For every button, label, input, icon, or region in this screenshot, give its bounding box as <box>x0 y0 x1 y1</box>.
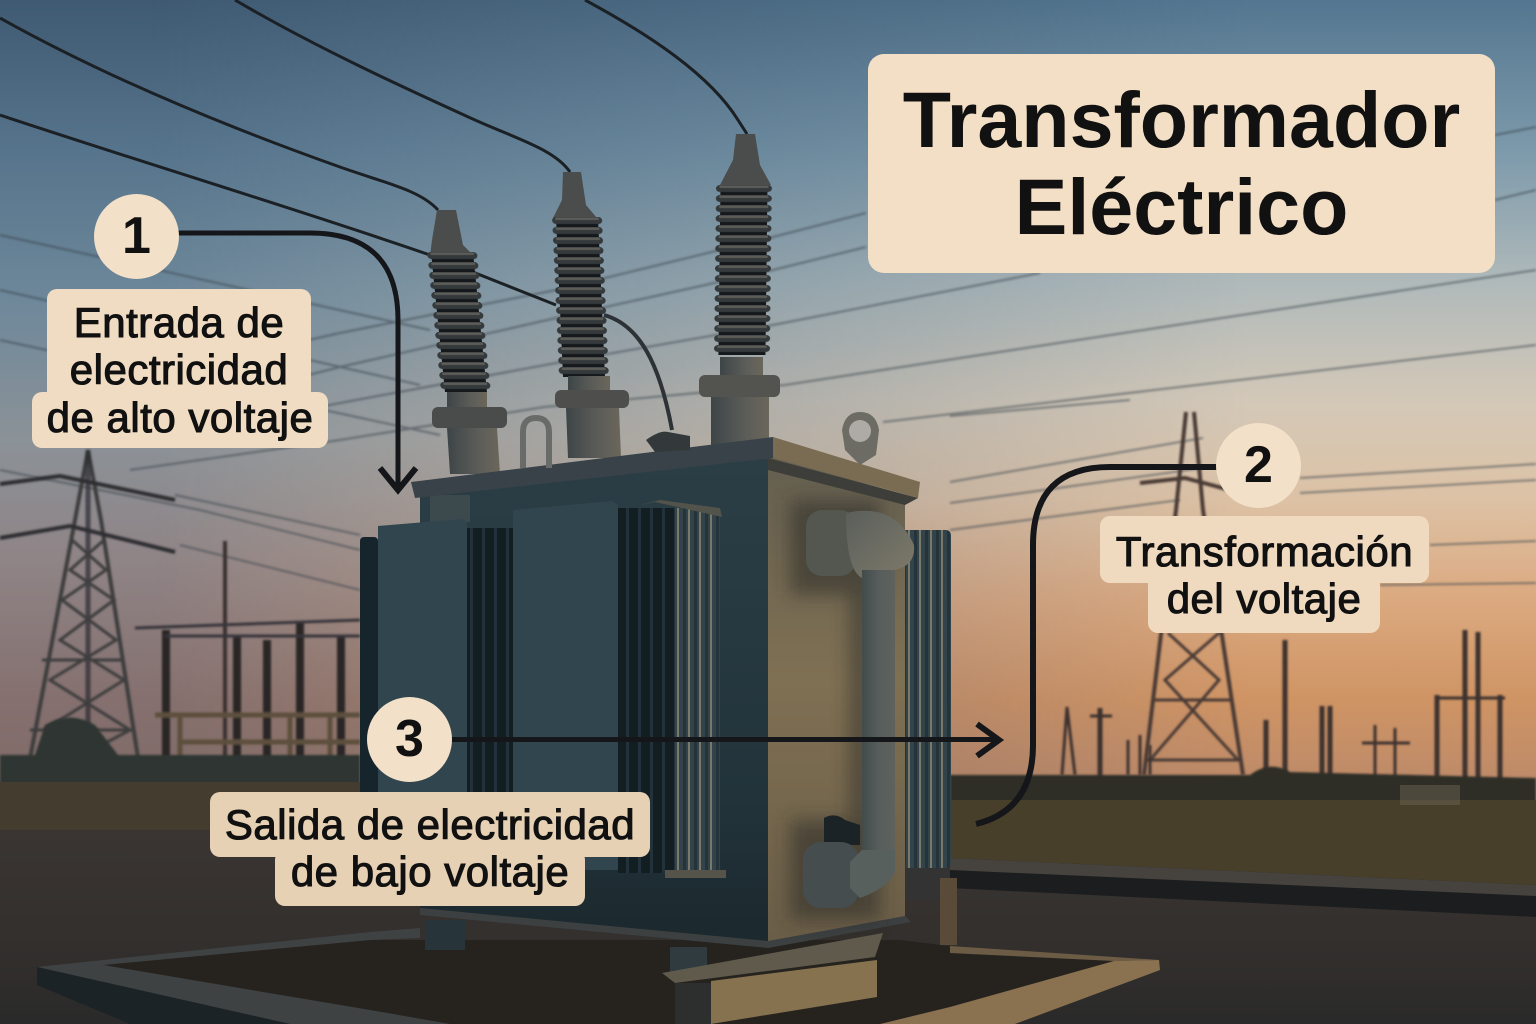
left panel <box>378 519 467 800</box>
bracket <box>430 495 470 522</box>
gravel ground <box>0 830 1536 1024</box>
title <box>868 54 1495 273</box>
pipe <box>803 510 914 908</box>
centre fins <box>618 500 726 878</box>
background power lines <box>0 127 1536 590</box>
insulator 3 <box>699 134 780 447</box>
number badge 2 <box>1216 423 1301 508</box>
label 1: Entrada de <box>74 299 284 346</box>
lifting lug eye <box>842 412 879 465</box>
title: Eléctrico <box>1015 162 1348 251</box>
top flange <box>806 510 856 576</box>
fence rail <box>950 858 1536 917</box>
top elbow <box>846 511 914 578</box>
arrow 2 <box>976 467 1220 824</box>
label 3 <box>210 792 650 857</box>
insulator 1 <box>427 210 507 474</box>
number badge 1 <box>94 194 179 279</box>
label 1 <box>47 289 311 401</box>
label 1: electricidad <box>70 346 288 393</box>
number badge 2: 2 <box>1244 436 1273 494</box>
lower elbow <box>850 850 895 898</box>
transformer <box>360 134 957 1024</box>
label 3 last line <box>275 850 585 906</box>
lower valve block <box>824 815 860 845</box>
field <box>0 782 1536 890</box>
arrow 1 <box>178 233 416 490</box>
arrow 3 <box>450 724 999 756</box>
right lattice tower <box>1140 412 1243 775</box>
pipe shadows <box>790 500 880 920</box>
tank side face <box>768 455 905 948</box>
lifting lug U <box>523 418 549 468</box>
title: Transformador <box>903 75 1460 164</box>
number badge 3 <box>367 697 452 782</box>
tree line <box>0 718 1536 815</box>
label 2 last line <box>1148 575 1380 633</box>
tank front face <box>420 455 768 948</box>
centre panel <box>513 501 618 870</box>
connector <box>646 432 690 452</box>
sky <box>0 0 1536 800</box>
left radiator <box>360 537 378 837</box>
tank lid <box>411 437 920 505</box>
left fins <box>467 528 513 848</box>
label 2 last line: del voltaje <box>1167 575 1361 622</box>
label 3: Salida de electricidad <box>225 801 635 848</box>
label 3 last line: de bajo voltaje <box>291 848 569 895</box>
insulator 2 <box>552 172 629 458</box>
number badge 3: 3 <box>395 710 424 768</box>
right radiator <box>897 530 951 868</box>
vertical run <box>862 560 895 855</box>
label 1 last line: de alto voltaje <box>47 394 313 441</box>
tank base trim <box>420 908 911 948</box>
plinth <box>425 878 957 1024</box>
incoming wires <box>0 0 747 430</box>
right distant poles and small tower <box>1062 630 1505 840</box>
label 2 <box>1100 516 1429 583</box>
lower flange <box>803 842 859 908</box>
label 2: Transformación <box>1116 528 1413 575</box>
concrete pad <box>37 928 1160 1024</box>
number badge 1: 1 <box>122 207 151 265</box>
left substation poles <box>135 541 360 800</box>
left lattice tower <box>0 450 175 812</box>
